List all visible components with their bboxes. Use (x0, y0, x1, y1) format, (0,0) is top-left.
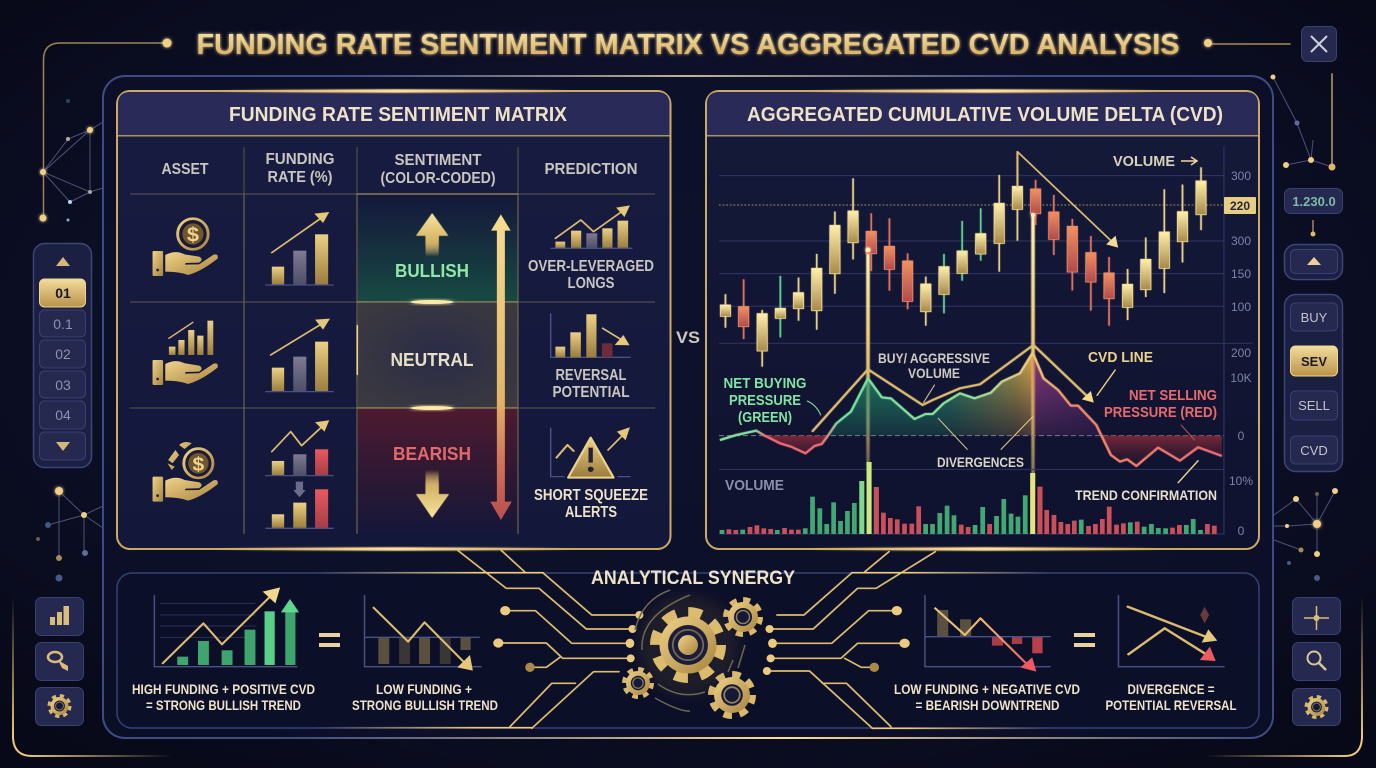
peak diamond markers (866, 213, 1035, 252)
icon: chart in hand (153, 321, 218, 385)
CVD area above zero (824, 353, 1102, 437)
prediction labels: LONGS (568, 275, 614, 292)
chart: rising funding row 1 (265, 212, 334, 285)
chart annotations: BUY/ AGGRESSIVE (878, 350, 990, 366)
chart: mixed funding row 3 (265, 420, 334, 528)
icon: breaking coin in hand (153, 442, 218, 502)
CVD delta line (720, 353, 1222, 466)
equals sign right (1074, 633, 1095, 647)
chart annotations: NET BUYING (724, 375, 806, 392)
right sidebar: mode buttons: CVD (1300, 443, 1328, 458)
envelope arrow head (1082, 391, 1094, 403)
sentiment cell: bullish (358, 195, 518, 302)
panel background (706, 91, 1259, 549)
left sidebar: page selector: 02 (55, 346, 71, 362)
axis labels: price: 10K (1230, 371, 1252, 385)
column headers: RATE (%) (268, 169, 332, 186)
equals sign left (319, 633, 340, 647)
icons: asset column (153, 219, 218, 502)
chart: low funding (365, 595, 482, 671)
main title: FUNDING RATE SENTIMENT MATRIX VS AGGREGATED CVD ANALYSIS (196, 29, 1180, 61)
title connector dots (162, 38, 1212, 48)
left sidebar: page selector: 04 (55, 407, 71, 423)
price trend arrow (1017, 152, 1118, 248)
chart annotations: VOLUME (908, 365, 960, 381)
chart annotations (724, 350, 1217, 503)
left sidebar: page selector: 0.1 (53, 316, 73, 332)
right sidebar: close button (1302, 26, 1336, 62)
circuit traces left (314, 550, 639, 728)
icon: breaking coin in hand: $ (192, 454, 204, 475)
gear glow (638, 595, 738, 695)
panel: funding rate sentiment matrix (117, 90, 670, 550)
prediction labels: OVER-LEVERAGED (528, 258, 654, 275)
gear motion arcs (635, 590, 745, 711)
synergy captions: LOW FUNDING + NEGATIVE CVD (894, 681, 1080, 697)
sentiment label: bearish: BEARISH (393, 444, 471, 464)
panel heading: FUNDING RATE SENTIMENT MATRIX (229, 104, 568, 126)
synergy captions: DIVERGENCE = (1128, 681, 1214, 697)
axis labels: price: 100 (1231, 300, 1251, 314)
chart annotations: PRESSURE (RED) (1104, 404, 1217, 421)
synergy captions: LOW FUNDING + (376, 681, 472, 697)
axis labels: price: 0 (1238, 429, 1245, 443)
price tag 220 (1224, 197, 1256, 214)
chart annotations: TREND CONFIRMATION (1075, 487, 1217, 503)
column headers: SENTIMENT (394, 152, 482, 169)
prediction labels: REVERSAL (556, 367, 626, 384)
constellation: top right (1270, 74, 1336, 236)
chart: high funding positive CVD (154, 587, 299, 667)
annotation pointers (807, 370, 1198, 483)
left sidebar: page selector: 01 (55, 285, 71, 301)
arrow: bullish up (416, 213, 448, 257)
prediction labels: SHORT SQUEEZE (534, 487, 648, 504)
icons: funding rate column (265, 212, 334, 528)
synergy captions: STRONG BULLISH TREND (352, 697, 498, 713)
column headers (162, 151, 638, 187)
panel header band (118, 92, 670, 136)
right sidebar: mode buttons: SEV (1301, 354, 1327, 369)
axis labels: price: 0 (1238, 524, 1245, 538)
volume pointer: VOLUME (1113, 154, 1175, 170)
chart annotations: NET SELLING (1129, 387, 1217, 404)
icon: coin in hand (153, 219, 218, 276)
icon: coin in hand: $ (187, 224, 199, 246)
CVD line gold envelope (813, 345, 1088, 431)
synergy frame (117, 573, 1259, 728)
prediction labels: ALERTS (565, 504, 617, 521)
constellation: lower left (36, 487, 103, 582)
synergy captions: HIGH FUNDING + POSITIVE CVD (132, 681, 315, 697)
volume bars (720, 462, 1217, 534)
prediction labels: POTENTIAL (552, 384, 630, 401)
chart annotations: CVD LINE (1088, 350, 1153, 366)
column headers: ASSET (162, 161, 209, 178)
right sidebar: value readout: 1.230.0 (1292, 194, 1336, 209)
constellation: top left (40, 99, 103, 222)
panel header band (707, 92, 1258, 136)
CVD and volume chart (719, 345, 1224, 534)
circuit nodes left (493, 606, 643, 672)
right sidebar: mode buttons (1284, 294, 1342, 472)
axis labels: price: 300 (1231, 234, 1251, 248)
chart: low funding negative CVD (925, 595, 1051, 672)
axis labels: price (1229, 169, 1253, 538)
panel background (117, 91, 670, 549)
row glow accents (356, 300, 454, 410)
column headers: FUNDING (266, 151, 334, 168)
chart annotations: DIVERGENCES (937, 454, 1024, 470)
right sidebar: tool buttons (1292, 598, 1340, 726)
chart annotations: VOLUME (725, 477, 784, 494)
prediction icons (551, 205, 632, 478)
outer frame (103, 75, 1273, 739)
panel heading: AGGREGATED CUMULATIVE VOLUME DELTA (CVD) (747, 104, 1223, 126)
sentiment cell: bearish (358, 409, 518, 534)
axis labels: price: 200 (1231, 346, 1251, 360)
column headers: PREDICTION (544, 161, 638, 178)
prediction labels (528, 258, 654, 521)
circuit nodes right (763, 606, 910, 675)
vertical glow beams (866, 215, 1034, 500)
synergy captions: POTENTIAL REVERSAL (1106, 697, 1237, 713)
price chart grid (719, 147, 1253, 534)
column headers: (COLOR-CODED) (380, 170, 496, 187)
right sidebar: value readout (1284, 188, 1342, 214)
gear: lower left (624, 669, 652, 697)
gear: main (656, 613, 720, 677)
arrow: bearish down (416, 470, 449, 518)
icon: short squeeze warning (551, 427, 631, 478)
chart annotations: (GREEN) (738, 409, 792, 426)
chart annotations: PRESSURE (729, 392, 801, 409)
matrix grid (130, 147, 655, 534)
panel: analytical synergy (117, 550, 1259, 728)
CVD area below zero (760, 436, 1222, 466)
panel: aggregated CVD (706, 90, 1259, 550)
VS label: VS (676, 328, 700, 347)
left sidebar: page selector: 03 (55, 377, 71, 393)
axis labels: price: 300 (1231, 169, 1251, 183)
candlestick chart (720, 152, 1206, 367)
right sidebar: mode buttons: SELL (1298, 398, 1330, 413)
gear: upper right (726, 600, 760, 634)
synergy heading: ANALYTICAL SYNERGY (591, 568, 795, 589)
chart: rising funding row 2 (265, 319, 334, 392)
icon: over-leveraged chart (551, 205, 632, 248)
price tag 220: 220 (1230, 199, 1250, 213)
synergy captions: = STRONG BULLISH TREND (146, 697, 301, 713)
left sidebar: icon buttons (36, 598, 84, 726)
right sidebar: mode buttons: BUY (1301, 310, 1328, 325)
chart: divergence (1118, 595, 1225, 667)
sentiment label: neutral: NEUTRAL (390, 350, 474, 370)
constellation: lower right (1274, 488, 1338, 581)
axis labels: price: 10% (1229, 474, 1253, 488)
sentiment arrows (416, 213, 512, 520)
left sidebar: page selector (34, 244, 92, 468)
synergy captions (132, 681, 1237, 713)
right sidebar: up control (1284, 244, 1342, 280)
axis labels: price: 150 (1231, 267, 1251, 281)
icon: reversal chart (551, 313, 631, 357)
arrow: vertical sentiment scale (490, 214, 512, 520)
gear: lower right (712, 675, 752, 715)
sentiment cell: neutral (358, 303, 518, 408)
circuit traces right (767, 552, 1050, 728)
sentiment label: bullish: BULLISH (395, 261, 469, 281)
synergy captions: = BEARISH DOWNTREND (916, 697, 1060, 713)
central gears (624, 590, 760, 715)
